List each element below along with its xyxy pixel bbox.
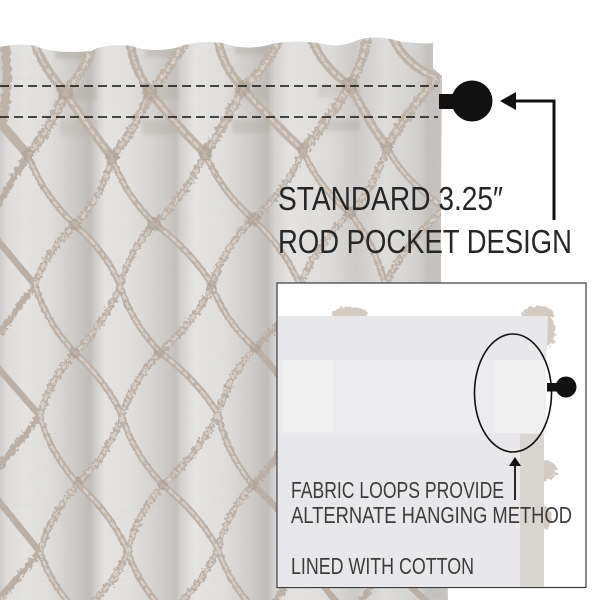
fabric back — [278, 316, 548, 587]
fabric loop: right — [495, 360, 546, 433]
arrow: pointing at rod — [500, 92, 554, 220]
tufts behind fabric — [332, 306, 557, 531]
icon: curtain rod end — [439, 80, 492, 122]
arrow: up to loop — [509, 457, 521, 500]
icon: inset rod end — [547, 376, 576, 398]
rod pocket dashed guide lines — [0, 86, 438, 117]
side hem strip — [520, 434, 544, 587]
callout ellipse — [474, 334, 552, 452]
rod pocket shaded patches — [55, 43, 448, 600]
inset caption: LINED WITH COTTON — [291, 553, 474, 579]
inset caption — [291, 477, 572, 579]
tufted lattice pattern — [0, 35, 445, 600]
panel: curtain photo — [0, 35, 450, 600]
panel: inset back of curtain — [277, 283, 586, 588]
pocket band — [278, 360, 546, 433]
inset caption: FABRIC LOOPS PROVIDE — [291, 477, 504, 503]
fabric loop: left — [283, 360, 333, 432]
heading: rod pocket design — [278, 180, 572, 260]
heading: rod pocket design: STANDARD 3.25″ — [278, 180, 503, 217]
